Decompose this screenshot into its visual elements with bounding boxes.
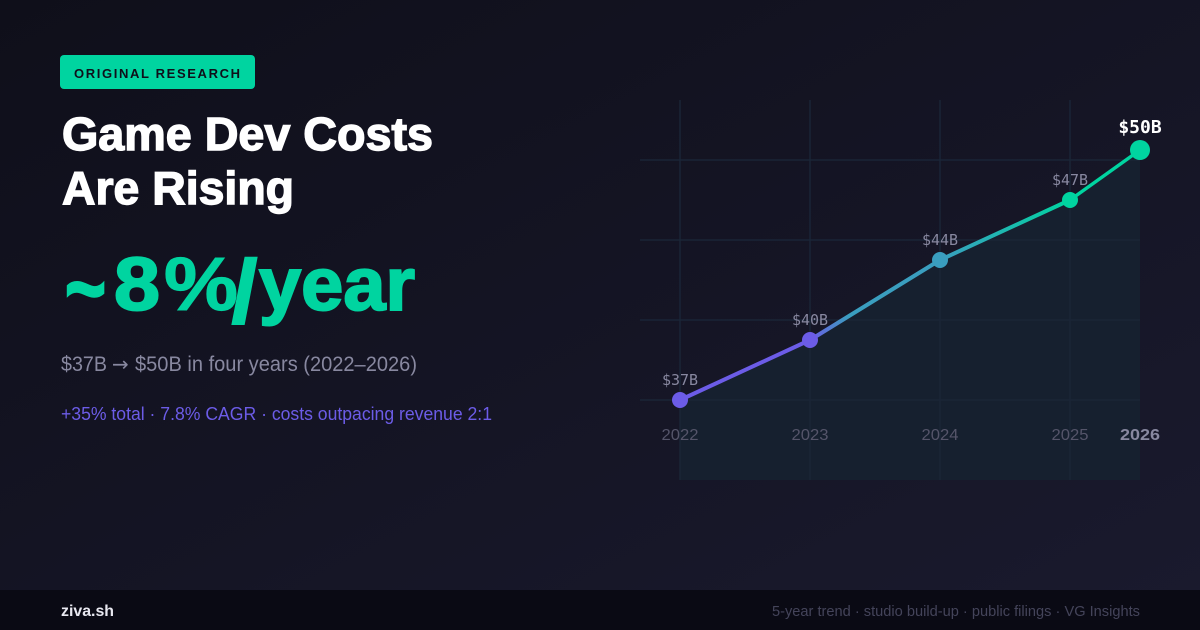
supporting stats: +35% total · 7.8% CAGR · costs outpacing revenue 2:1 <box>61 404 492 424</box>
headline stat: 8 <box>114 242 160 326</box>
trend line <box>680 150 1140 400</box>
title: Game Dev Costs <box>62 108 433 160</box>
data points <box>672 140 1150 408</box>
subtitle: → <box>112 352 129 376</box>
year labels: 2024 <box>922 427 959 444</box>
year labels <box>662 427 1160 444</box>
brand: ziva.sh <box>61 603 114 620</box>
sources: 5-year trend · studio build-up · public filings · VG Insights <box>772 603 1140 620</box>
value labels <box>662 117 1162 389</box>
badge: original research: ORIGINAL RESEARCH <box>74 66 240 81</box>
year labels: 2026 <box>1120 427 1160 444</box>
title: Are Rising <box>62 162 294 214</box>
value labels: $50B <box>1118 117 1162 138</box>
value labels: $37B <box>662 371 698 389</box>
value labels: $47B <box>1052 171 1088 189</box>
headline stat: year <box>259 242 415 326</box>
headline stat <box>65 239 415 341</box>
headline stat: % <box>164 242 238 326</box>
year labels: 2025 <box>1052 427 1089 444</box>
badge: original research <box>60 55 255 89</box>
subtitle: $37B <box>61 353 107 376</box>
year labels: 2022 <box>662 427 699 444</box>
area under line <box>680 150 1140 480</box>
footer bar <box>0 590 1200 630</box>
subtitle: $50B in four years (2022–2026) <box>135 353 417 376</box>
headline stat: / <box>232 242 257 341</box>
title <box>62 108 433 214</box>
headline stat: ~ <box>65 239 106 339</box>
year labels: 2023 <box>792 427 829 444</box>
line chart <box>640 100 1162 480</box>
value labels: $44B <box>922 231 958 249</box>
value labels: $40B <box>792 311 828 329</box>
